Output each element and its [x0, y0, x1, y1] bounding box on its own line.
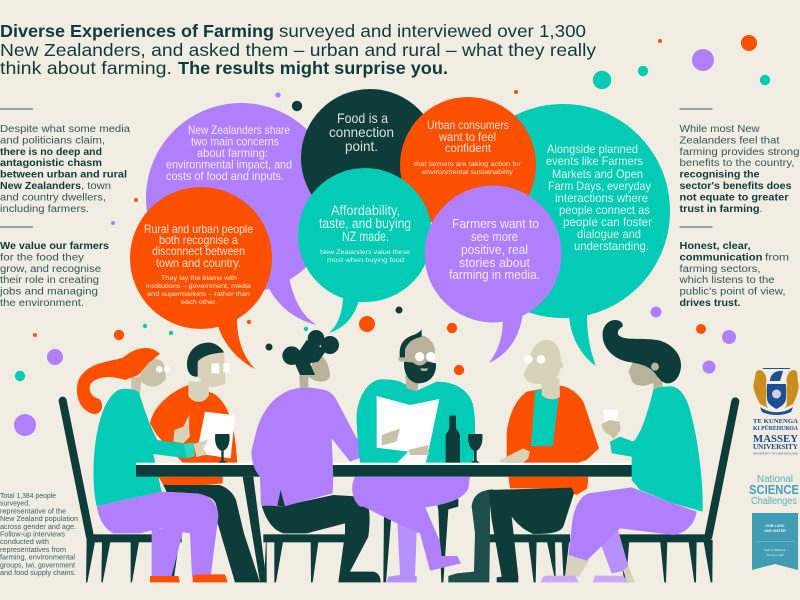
- text block: left column: the environment.: [0, 298, 84, 309]
- speech bubble: disconnect: institutions – government, media: [146, 283, 252, 290]
- logo: Massey University: MASSEY: [753, 434, 799, 445]
- speech bubble: disconnect: town and country.: [156, 256, 241, 270]
- speech bubble: food is a connection point: point.: [345, 138, 378, 154]
- text block: right column: farming sectors,: [680, 264, 760, 275]
- chair: left: [63, 401, 182, 582]
- speech bubble: food is a connection point: Food is a: [337, 110, 388, 126]
- logo: National Science Challenges: National: [757, 474, 793, 485]
- banner: Our Land and Water: OUR LAND: [766, 524, 785, 528]
- speech bubble: two main concerns: two main concerns: [191, 134, 279, 148]
- text block: left column: antagonistic chasm: [0, 158, 102, 169]
- logo: Massey University: TE KUNENGA: [753, 418, 798, 425]
- title: surveyed and interviewed over 1,300: [279, 21, 586, 41]
- speech bubble: farmers want stories: Farmers want to: [452, 216, 539, 231]
- speech bubble: everyday interactions: people connect as: [559, 203, 650, 217]
- title: [0, 21, 596, 78]
- speech bubble: disconnect: [130, 187, 272, 369]
- speech bubble: urban consumers: confident: [445, 141, 492, 155]
- logo: Massey University: UNIVERSITY: [753, 443, 798, 451]
- speech bubble: everyday interactions: Alongside planned: [547, 142, 638, 156]
- text block: left column: New Zealanders: [0, 181, 81, 192]
- text block: right column: communication: [680, 252, 762, 263]
- text block: right column: not equate to greater: [680, 192, 789, 203]
- speech bubble: affordability: NZ made.: [342, 229, 389, 244]
- text block: survey note: representatives from: [0, 545, 66, 554]
- speech bubble: everyday interactions: dialogue and: [577, 227, 641, 241]
- text block: survey note: groups, Iwi, government: [0, 560, 76, 569]
- text block: right column: recognising the: [680, 170, 760, 181]
- text block: left column: jobs and managing: [0, 287, 98, 298]
- speech bubble: disconnect: They lay the blame with: [161, 275, 238, 282]
- text block: right column: Honest, clear,: [680, 241, 751, 252]
- icon: wine bottle and glass: [446, 416, 483, 463]
- text block: right column: While most New: [680, 124, 760, 135]
- text block: survey note: representative of the: [0, 506, 66, 515]
- title: The results might surprise you.: [178, 58, 448, 78]
- speech bubble: disconnect: disconnect between: [152, 244, 245, 258]
- speech bubble: affordability: most when buying food: [327, 257, 405, 264]
- text block: left column: and country dwellers,: [0, 192, 106, 203]
- banner: Our Land and Water: [752, 513, 798, 570]
- speech bubble: disconnect: each other.: [181, 299, 217, 306]
- speech bubble: affordability: Affordability,: [331, 203, 400, 218]
- speech bubble: farmers want stories: positive, real: [461, 242, 528, 257]
- speech bubble: two main concerns: environmental impact, and: [166, 158, 292, 172]
- title: think about farming.: [0, 58, 172, 78]
- text block: left column: [0, 108, 130, 309]
- speech bubble: farmers want stories: stories about: [459, 255, 530, 270]
- person: man in orange shirt: [150, 343, 260, 582]
- text block: right column: public's point of view,: [680, 287, 786, 298]
- text block: survey note: farming, environmental: [0, 553, 75, 562]
- text block: left column: for the food they: [0, 252, 84, 263]
- text block: right column: drives trust.: [680, 298, 741, 309]
- speech bubble: farmers want stories: farming in media.: [449, 267, 540, 282]
- text block: survey note: and food supply chains.: [0, 568, 76, 577]
- speech bubble: affordability: taste, and buying: [319, 216, 411, 231]
- text block: left column: there is no deep and: [0, 147, 102, 158]
- speech bubble: urban consumers: want to feel: [438, 130, 496, 144]
- decorative confetti dots: [14, 35, 770, 436]
- banner: Our Land and Water: AND WATER: [764, 529, 786, 533]
- logo: National Science Challenges: Challenges: [751, 496, 797, 507]
- speech bubble: urban consumers: Urban consumers: [427, 118, 509, 132]
- speech bubble: food is a connection point: [301, 89, 439, 227]
- text block: survey note: conducted with: [0, 537, 49, 546]
- banner: Our Land and Water: Toiora te Wai: [766, 553, 784, 557]
- icon: wine glass: [215, 434, 230, 463]
- logo: National Science Challenges: [749, 474, 799, 507]
- text block: left column: We value our farmers: [0, 241, 109, 252]
- text block: right column: sector's benefits does: [680, 181, 792, 192]
- person: woman with red ponytail: [77, 348, 228, 582]
- illustration: right side people: [352, 320, 735, 582]
- text block: left column: grow, and recognise: [0, 264, 101, 275]
- speech bubble: everyday interactions: people can foster: [563, 215, 652, 229]
- text block: right column: which listens to the: [678, 275, 775, 286]
- text block: survey note: New Zealand population: [0, 514, 78, 523]
- speech bubble: urban consumers: that farmers are taking action for: [414, 161, 521, 168]
- chair: right: [617, 401, 735, 582]
- text block: survey note: surveyed,: [0, 499, 30, 508]
- speech bubble: everyday interactions: [456, 104, 670, 366]
- text block: right column: from: [765, 252, 789, 263]
- text block: right column: Zealanders feel that: [680, 135, 780, 146]
- illustration: people around a table: [63, 330, 635, 582]
- speech bubble: two main concerns: New Zealanders share: [188, 123, 290, 137]
- speech bubble: affordability: New Zealanders value these: [320, 249, 411, 256]
- text block: left column: and politicians claim,: [0, 135, 105, 146]
- logo: Massey University: [753, 368, 799, 456]
- text block: left column: , town: [81, 181, 111, 192]
- title: New Zealanders, and asked them – urban and rural – what they really: [0, 40, 596, 60]
- speech bubble: everyday interactions: events like Farmers: [546, 154, 643, 168]
- text block: survey note: Follow-up interviews: [0, 530, 65, 538]
- text block: left column: their role in creating: [0, 275, 99, 286]
- speech bubble: two main concerns: [146, 103, 336, 325]
- speech bubble: urban consumers: [400, 97, 536, 233]
- crest: [753, 368, 799, 415]
- banner: Our Land and Water: Toitū te Whenua,: [764, 548, 786, 552]
- speech bubble: everyday interactions: Markets and Open: [552, 167, 643, 181]
- person: bald man in orange: [448, 340, 599, 582]
- chair: bearded man: [383, 499, 458, 582]
- speech bubble: disconnect: Rural and urban people: [144, 222, 253, 236]
- chair: second: [263, 534, 345, 582]
- title: Diverse Experiences of Farming: [0, 21, 274, 41]
- text block: right column: benefits to the country,: [680, 158, 794, 169]
- table: [136, 463, 635, 582]
- chair: bald man: [488, 534, 570, 582]
- speech bubble: everyday interactions: Farm Days, everyday: [548, 179, 651, 193]
- speech bubble: two main concerns: about farming:: [197, 146, 268, 160]
- speech bubble: disconnect: and supermarkets – rather than: [147, 291, 251, 298]
- speech bubble: farmers want stories: see more: [471, 229, 518, 244]
- person: bearded man in teal: [352, 329, 475, 582]
- text block: right column: farming provides strong: [680, 147, 800, 158]
- speech bubble: everyday interactions: interactions where: [555, 191, 648, 205]
- speech bubble: urban consumers: environmental sustainability: [422, 169, 514, 176]
- text block: right column: .: [760, 204, 762, 215]
- speech bubble: farmers want stories: [424, 186, 562, 363]
- speech bubble: affordability: [298, 168, 432, 333]
- person: woman in purple from behind: [251, 330, 400, 582]
- text block: left column: including farmers.: [0, 204, 89, 215]
- text block: left column: between urban and rural: [0, 170, 127, 181]
- speech bubble: disconnect: both recognise a: [159, 233, 238, 247]
- speech bubble: everyday interactions: understanding.: [574, 239, 649, 253]
- text block: survey note: across gender and age.: [0, 522, 76, 531]
- text block: left column: Despite what some media: [0, 124, 130, 135]
- person: man with quiff in teal: [541, 320, 703, 582]
- speech bubble: food is a connection point: connection: [329, 124, 394, 140]
- text block: survey note: [0, 491, 78, 577]
- text block: survey note: Total 1,384 people: [0, 491, 56, 500]
- logo: Massey University: UNIVERSITY OF NEW ZEALAND: [753, 452, 798, 456]
- text block: right column: trust in farming: [680, 204, 760, 215]
- text block: right column: [678, 108, 800, 309]
- speech bubble: two main concerns: costs of food and inputs.: [166, 169, 284, 183]
